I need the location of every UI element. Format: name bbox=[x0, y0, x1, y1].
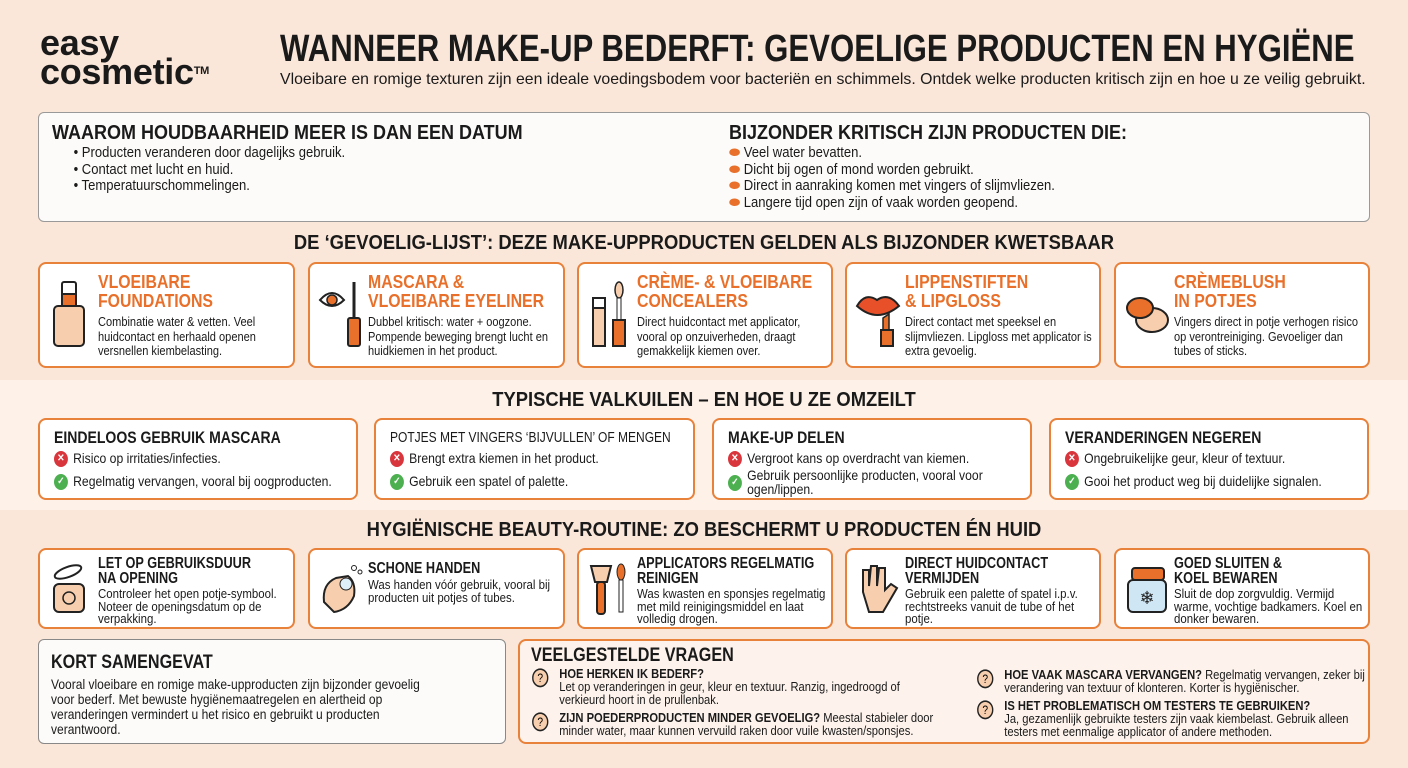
left block: houdbaarheid: • Producten veranderen door dagelijks gebruik. bbox=[74, 145, 345, 161]
pitfall: delen: ✓ bbox=[731, 476, 739, 488]
card: cremeblush bbox=[1114, 262, 1370, 368]
faq 2: ZIJN POEDERPRODUCTEN MINDER GEVOELIG? Meestal stabieler door minder water, maar kunnen vervuild raken door vuile kwasten/sponsjes. bbox=[559, 710, 933, 738]
faq 4: Ja, gezamenlijk gebruikte testers zijn vaak kiembelast. Gebruik alleen testers met eenmalige applicator of andere methoden. bbox=[1004, 711, 1349, 739]
card: lipstick: Direct contact met speeksel en slijmvliezen. Lipgloss met applicator is extra gevoelig. bbox=[905, 314, 1092, 358]
routine: huidcontact: DIRECT HUIDCONTACT bbox=[905, 555, 1048, 572]
pitfall: negeren bbox=[1049, 418, 1369, 500]
right block: kritisch: ⬬ Langere tijd open zijn of vaak worden geopend. bbox=[729, 194, 1018, 210]
routine: gebruiksduur: LET OP GEBRUIKSDUUR bbox=[98, 555, 251, 572]
card: mascara: Dubbel kritisch: water + oogzone. Pompende beweging brengt lucht en huidkiemen in het product. bbox=[368, 314, 548, 358]
heading: gevoelig-lijst: DE ‘GEVOELIG-LIJST’: DEZE MAKE-UPPRODUCTEN GELDEN ALS BIJZONDER KWETSBAAR bbox=[294, 232, 1114, 254]
right block: kritisch: ⬬ Veel water bevatten. bbox=[729, 145, 862, 161]
pitfall: negeren: ✓ bbox=[1068, 476, 1076, 487]
routine: koel bewaren: GOED SLUITEN & bbox=[1174, 555, 1282, 572]
pitfall: potjes: ✕ bbox=[393, 453, 401, 464]
card: mascara: MASCARA & bbox=[368, 272, 464, 292]
icon: brushes bbox=[590, 564, 626, 615]
right block: kritisch bbox=[729, 122, 1127, 210]
card: cremeblush: Vingers direct in potje verhogen risico op verontreiniging. Gevoeliger dan tubes of sticks. bbox=[1174, 314, 1358, 358]
routine: gebruiksduur: NA OPENING bbox=[98, 570, 178, 587]
panel: FAQ: VEELGESTELDE VRAGEN bbox=[531, 645, 734, 666]
routine: gebruiksduur bbox=[38, 548, 295, 629]
card: concealers: CRÈME- & VLOEIBARE bbox=[637, 272, 812, 292]
right block: kritisch: ⬬ Direct in aanraking komen met vingers of slijmvliezen. bbox=[729, 178, 1055, 194]
pitfall: mascara: Regelmatig vervangen, vooral bij oogproducten. bbox=[73, 473, 332, 489]
card: cremeblush: IN POTJES bbox=[1174, 290, 1257, 310]
card: mascara: VLOEIBARE EYELINER bbox=[368, 290, 544, 310]
routine: applicators: REINIGEN bbox=[637, 570, 698, 587]
routine: huidcontact: VERMIJDEN bbox=[905, 570, 979, 587]
icon: lips and lipstick bbox=[856, 296, 900, 347]
title: WANNEER MAKE-UP BEDERFT: GEVOELIGE PRODUCTEN EN HYGIËNE bbox=[280, 28, 1355, 70]
icon: cold jar: ❄ bbox=[1139, 588, 1155, 608]
left block: houdbaarheid bbox=[52, 122, 523, 194]
icon: pot bbox=[1126, 297, 1169, 333]
pitfall: negeren: Gooi het product weg bij duidelijke signalen. bbox=[1084, 473, 1322, 489]
icon: foundation bottle bbox=[53, 281, 85, 347]
pitfall: delen: MAKE-UP DELEN bbox=[728, 429, 845, 447]
faq 3: ? bbox=[982, 674, 988, 686]
faq 1: HOE HERKEN IK BEDERF? bbox=[559, 666, 704, 681]
routine: applicators: APPLICATORS REGELMATIG bbox=[637, 555, 814, 572]
routine: handen: SCHONE HANDEN bbox=[368, 560, 480, 577]
pitfall: mascara: ✓ bbox=[57, 476, 65, 487]
left block: houdbaarheid: • Temperatuurschommelingen. bbox=[74, 178, 250, 194]
icon: hand bbox=[862, 565, 898, 613]
left block: houdbaarheid: WAAROM HOUDBAARHEID MEER IS DAN EEN DATUM bbox=[52, 122, 523, 144]
faq 1: ? bbox=[537, 673, 543, 685]
pitfall: potjes bbox=[374, 418, 695, 500]
heading: valkuilen: TYPISCHE VALKUILEN – EN HOE U ZE OMZEILT bbox=[492, 389, 916, 411]
pitfall: negeren: VERANDERINGEN NEGEREN bbox=[1065, 429, 1261, 447]
routine: gebruiksduur: Controleer het open potje-symbool. Noteer de openingsdatum op de verpakking. bbox=[98, 586, 277, 626]
routine: applicators bbox=[577, 548, 833, 629]
pitfall: mascara: Risico op irritaties/infecties. bbox=[73, 450, 221, 466]
card: foundations: FOUNDATIONS bbox=[98, 290, 213, 310]
pitfall: delen: Gebruik persoonlijke producten, vooral voor bbox=[747, 467, 983, 483]
pitfall: delen: ogen/lippen. bbox=[747, 480, 814, 496]
faq 4 bbox=[977, 698, 1349, 739]
pitfall: mascara: EINDELOOS GEBRUIK MASCARA bbox=[54, 429, 281, 447]
card: lipstick: & LIPGLOSS bbox=[905, 290, 1001, 310]
faq 1 bbox=[532, 666, 900, 707]
pitfall: delen: Vergroot kans op overdracht van kiemen. bbox=[747, 450, 969, 466]
card: foundations: VLOEIBARE bbox=[98, 272, 190, 292]
logo: cosmeticTM bbox=[40, 51, 209, 92]
left block: houdbaarheid: • Contact met lucht en huid. bbox=[74, 162, 233, 178]
card: concealers: CONCEALERS bbox=[637, 290, 748, 310]
right block: kritisch: ⬬ Dicht bij ogen of mond worden gebruikt. bbox=[729, 162, 974, 178]
card: lipstick: LIPPENSTIFTEN bbox=[905, 272, 1028, 292]
pitfall: delen bbox=[712, 418, 1032, 500]
card: foundations: Combinatie water & vetten. Veel huidcontact en herhaald openen versnellen kiembelasting. bbox=[98, 314, 256, 358]
card: foundations bbox=[38, 262, 295, 368]
background band: pitfalls bbox=[0, 380, 1408, 510]
icon: concealer bbox=[592, 281, 626, 347]
icon: washing hands bbox=[322, 565, 362, 613]
logo: easy bbox=[40, 22, 119, 63]
pitfall: potjes: Gebruik een spatel of palette. bbox=[409, 473, 568, 489]
icon: cold jar bbox=[1127, 567, 1167, 613]
routine: huidcontact bbox=[845, 548, 1101, 629]
pitfall: mascara: ✕ bbox=[57, 453, 65, 464]
routine: handen bbox=[308, 548, 565, 629]
card: lipstick bbox=[845, 262, 1101, 368]
routine: huidcontact: Gebruik een palette of spatel i.p.v. rechtstreeks vanuit de tube of het potje. bbox=[905, 586, 1078, 626]
faq 4: IS HET PROBLEMATISCH OM TESTERS TE GEBRUIKEN? bbox=[1004, 698, 1310, 713]
routine: applicators: Was kwasten en sponsjes regelmatig met mild reinigingsmiddel en laat volledig drogen. bbox=[637, 586, 825, 626]
routine: handen: Was handen vóór gebruik, vooral bij producten uit potjes of tubes. bbox=[368, 577, 550, 604]
routine: koel bewaren: KOEL BEWAREN bbox=[1174, 570, 1278, 587]
heading: routine: HYGIËNISCHE BEAUTY-ROUTINE: ZO BESCHERMT U PRODUCTEN ÉN HUID bbox=[367, 519, 1041, 541]
icon: open jar bbox=[53, 564, 85, 613]
routine: koel bewaren bbox=[1114, 548, 1370, 629]
card: concealers bbox=[577, 262, 833, 368]
panel: kort samengevat: KORT SAMENGEVAT bbox=[51, 652, 213, 673]
card: mascara bbox=[308, 262, 565, 368]
panel: kort samengevat bbox=[38, 639, 506, 744]
right block: kritisch: BIJZONDER KRITISCH ZIJN PRODUCTEN DIE: bbox=[729, 122, 1127, 144]
pitfall: negeren: Ongebruikelijke geur, kleur of textuur. bbox=[1084, 450, 1285, 466]
card: cremeblush: CRÈMEBLUSH bbox=[1174, 272, 1286, 292]
pitfall: potjes: POTJES MET VINGERS ‘BIJVULLEN’ OF MENGEN bbox=[390, 429, 671, 446]
pitfall: potjes: Brengt extra kiemen in het product. bbox=[409, 450, 599, 466]
routine: koel bewaren: Sluit de dop zorgvuldig. Vermijd warme, vochtige badkamers. Koel en donker bewaren. bbox=[1174, 586, 1362, 626]
faq 1: Let op veranderingen in geur, kleur en textuur. Ranzig, ingedroogd of verkieurd hoort in de prullenbak. bbox=[559, 679, 900, 707]
panel: FAQ bbox=[518, 639, 1370, 744]
logo bbox=[40, 22, 209, 92]
panel: kort samengevat: Vooral vloeibare en romige make-upproducten zijn bijzonder gevoelig voor bederf. Met bewuste hygiënemaatregelen en alertheid op veranderingen vermindert u het risico en gebruikt u producten verantwoord. bbox=[51, 676, 420, 737]
faq 3: HOE VAAK MASCARA VERVANGEN? Regelmatig vervangen, zeker bij verandering van textuur of klonteren. Korter is hygiënischer. bbox=[1004, 667, 1365, 695]
pitfall: mascara bbox=[38, 418, 358, 500]
pitfall: potjes: ✓ bbox=[393, 476, 401, 487]
subtitle: Vloeibare en romige texturen zijn een ideale voedingsbodem voor bacteriën en schimmels. Ontdek welke producten kritisch zijn en hoe u ze veilig gebruikt. bbox=[280, 71, 1366, 88]
panel: intro bbox=[38, 112, 1370, 222]
pitfall: negeren: ✕ bbox=[1068, 453, 1076, 464]
card: concealers: Direct huidcontact met applicator, vooral op onzuiverheden, draagt gemakkelijk kiemen over. bbox=[637, 314, 800, 358]
pitfall: delen: ✕ bbox=[731, 453, 739, 464]
faq 2: ? bbox=[537, 717, 543, 729]
faq 4: ? bbox=[982, 705, 988, 717]
icon: eye and mascara bbox=[318, 282, 361, 347]
